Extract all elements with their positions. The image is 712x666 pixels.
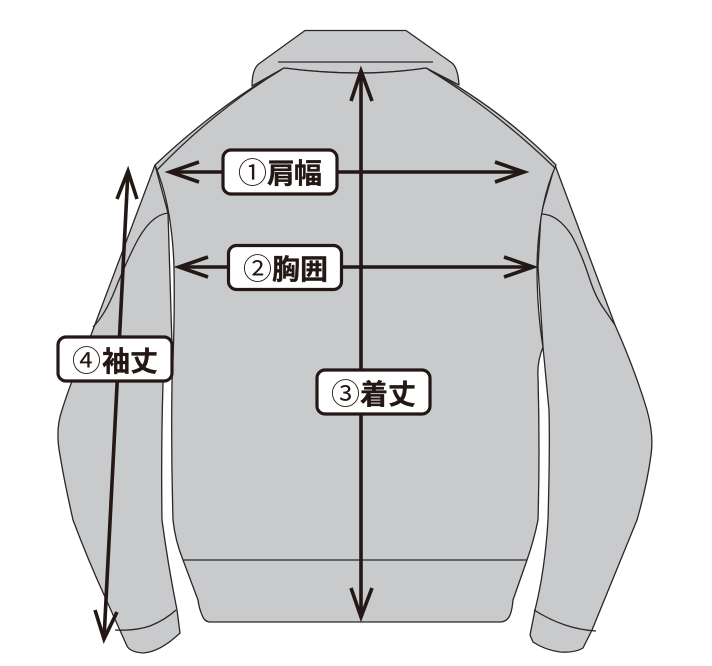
label 2: chest width: 囲 bbox=[300, 254, 328, 285]
body bbox=[155, 68, 556, 622]
label 4: sleeve length: 袖 bbox=[102, 346, 130, 377]
jacket illustration bbox=[58, 30, 652, 653]
label 4: sleeve length: 丈 bbox=[130, 346, 158, 377]
label 1: shoulder width: ① bbox=[238, 158, 267, 190]
label 4: sleeve length: ④ bbox=[72, 346, 101, 378]
label 1: shoulder width: 肩 bbox=[267, 158, 295, 189]
label 3: body length: 着 bbox=[360, 379, 388, 410]
label 4: sleeve length bbox=[58, 337, 172, 381]
arrow 4: sleeve length bbox=[95, 171, 137, 639]
arrow 3: body length bbox=[351, 71, 372, 617]
arrow 2: chest width bbox=[179, 257, 533, 277]
right sleeve bbox=[530, 165, 652, 652]
label 3: body length bbox=[317, 370, 430, 414]
arrow 1: shoulder width bbox=[170, 162, 524, 182]
label 1: shoulder width: 幅 bbox=[294, 158, 322, 189]
label 2: chest width: 胸 bbox=[272, 254, 300, 285]
garment seams bbox=[93, 62, 615, 631]
label 1: shoulder width bbox=[223, 150, 337, 194]
label 2: chest width bbox=[228, 246, 342, 290]
label 3: body length: 丈 bbox=[388, 379, 416, 410]
label 2: chest width: ② bbox=[243, 254, 272, 286]
left sleeve bbox=[58, 165, 180, 653]
label 3: body length: ③ bbox=[331, 379, 360, 411]
collar bbox=[252, 30, 459, 86]
